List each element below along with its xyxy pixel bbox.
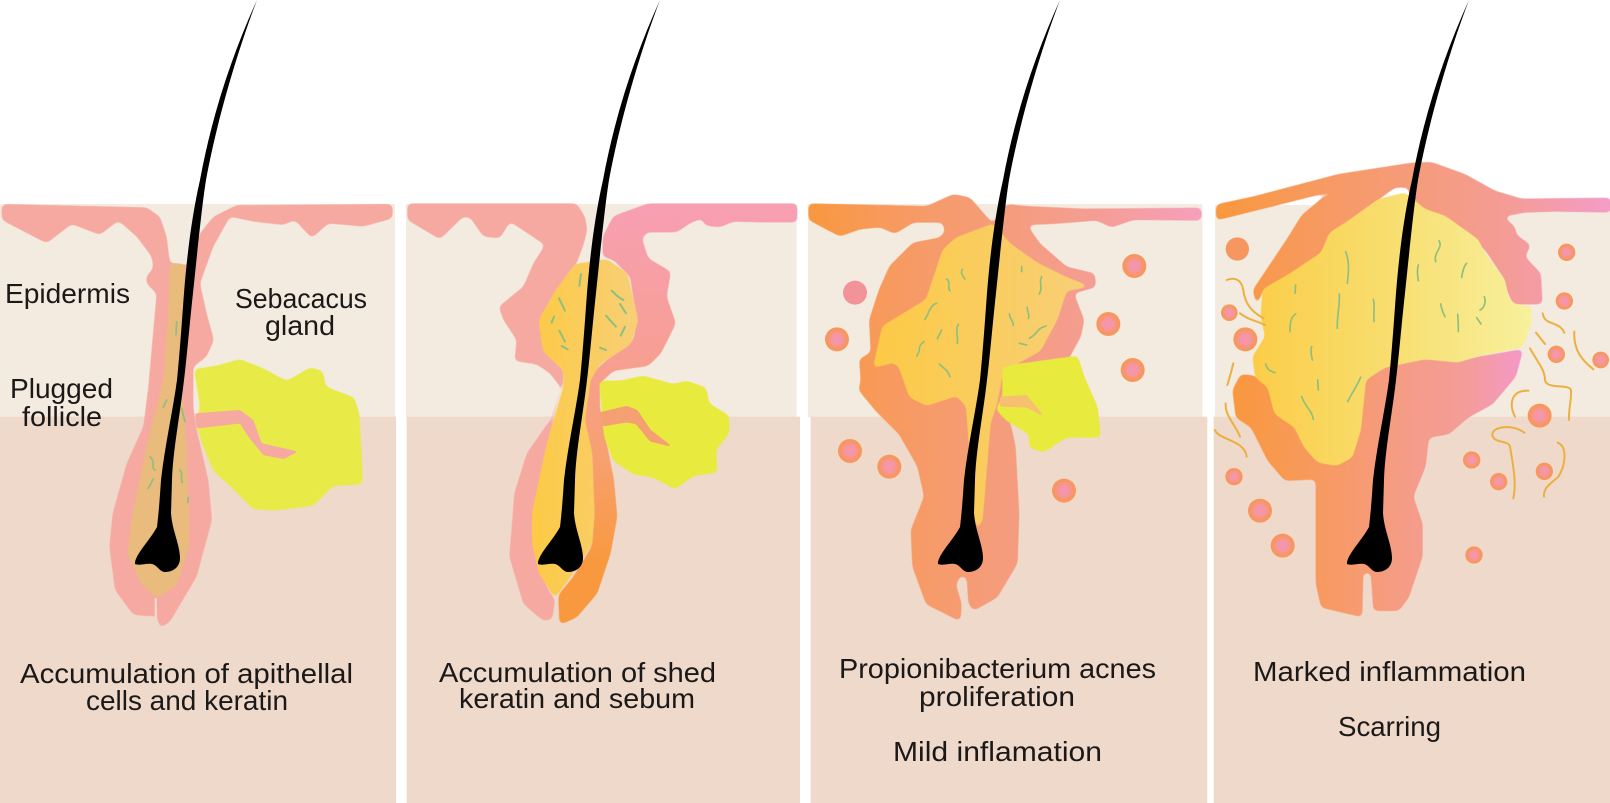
plug of keratin — [128, 263, 189, 598]
sebum core — [532, 259, 638, 598]
keratin flecks — [1266, 241, 1485, 419]
hair 3 — [938, 0, 1060, 572]
keratin flecks — [917, 267, 1046, 377]
caption: stage 2: Accumulation of shed — [439, 657, 716, 688]
follicle wall and epidermis — [2, 204, 393, 628]
pus-filled core — [1252, 192, 1532, 466]
label: Plugged follicle — [10, 373, 113, 432]
sebum and keratin core — [873, 223, 1092, 532]
keratin flecks — [552, 274, 626, 350]
caption: stage 3: Propionibacterium acnes — [839, 653, 1156, 684]
panel: stage 2 follicle — [406, 203, 800, 803]
panel: stage 4 follicle — [1214, 162, 1610, 803]
upper ruptured wall and epidermis — [1216, 162, 1610, 307]
label: Plugged follicle: Plugged — [10, 373, 113, 404]
lower wall — [1232, 349, 1523, 617]
inflamed wall and epidermis — [808, 194, 1202, 622]
sebaceous gland — [599, 376, 729, 489]
caption: stage 4: Marked inflammation — [1253, 656, 1526, 687]
hair 1 — [135, 0, 257, 572]
bacteria cells — [825, 254, 1146, 503]
collagen fibres — [1215, 279, 1593, 498]
hair 2 — [538, 0, 660, 572]
sebaceous gland — [194, 359, 363, 510]
gland duct — [195, 410, 298, 459]
caption: stage 1: cells and keratin — [86, 685, 288, 716]
panel: stage 1 follicle — [0, 204, 396, 803]
label: Epidermis: Epidermis — [5, 278, 130, 309]
label: Plugged follicle: follicle — [22, 401, 102, 432]
caption: stage 3: Mild inflamation — [893, 736, 1102, 767]
label: Sebacacus gland: gland — [265, 310, 335, 341]
caption: stage 4: Scarring — [1338, 711, 1441, 742]
caption: stage 3: proliferation — [919, 681, 1075, 712]
gland duct — [599, 406, 673, 447]
sebaceous gland — [996, 356, 1101, 453]
caption: stage 4 — [1253, 656, 1526, 742]
panel: stage 3 follicle — [808, 194, 1207, 803]
caption: stage 2 — [439, 657, 716, 714]
follicle bottom cleft — [152, 598, 159, 622]
bacteria cells — [1221, 237, 1609, 564]
caption: stage 2: keratin and sebum — [459, 683, 695, 714]
label: Sebacacus gland — [235, 283, 367, 341]
hair 4 — [1347, 0, 1469, 572]
right wall and epidermis — [558, 203, 797, 625]
caption: stage 1 — [20, 658, 353, 716]
label: Sebacacus gland: Sebacacus — [235, 283, 367, 314]
caption: stage 1: Accumulation of apithellal — [20, 658, 353, 689]
gland duct — [1000, 395, 1045, 417]
keratin flecks — [148, 322, 188, 502]
left wall and epidermis — [407, 203, 587, 621]
caption: stage 3 — [839, 653, 1156, 767]
